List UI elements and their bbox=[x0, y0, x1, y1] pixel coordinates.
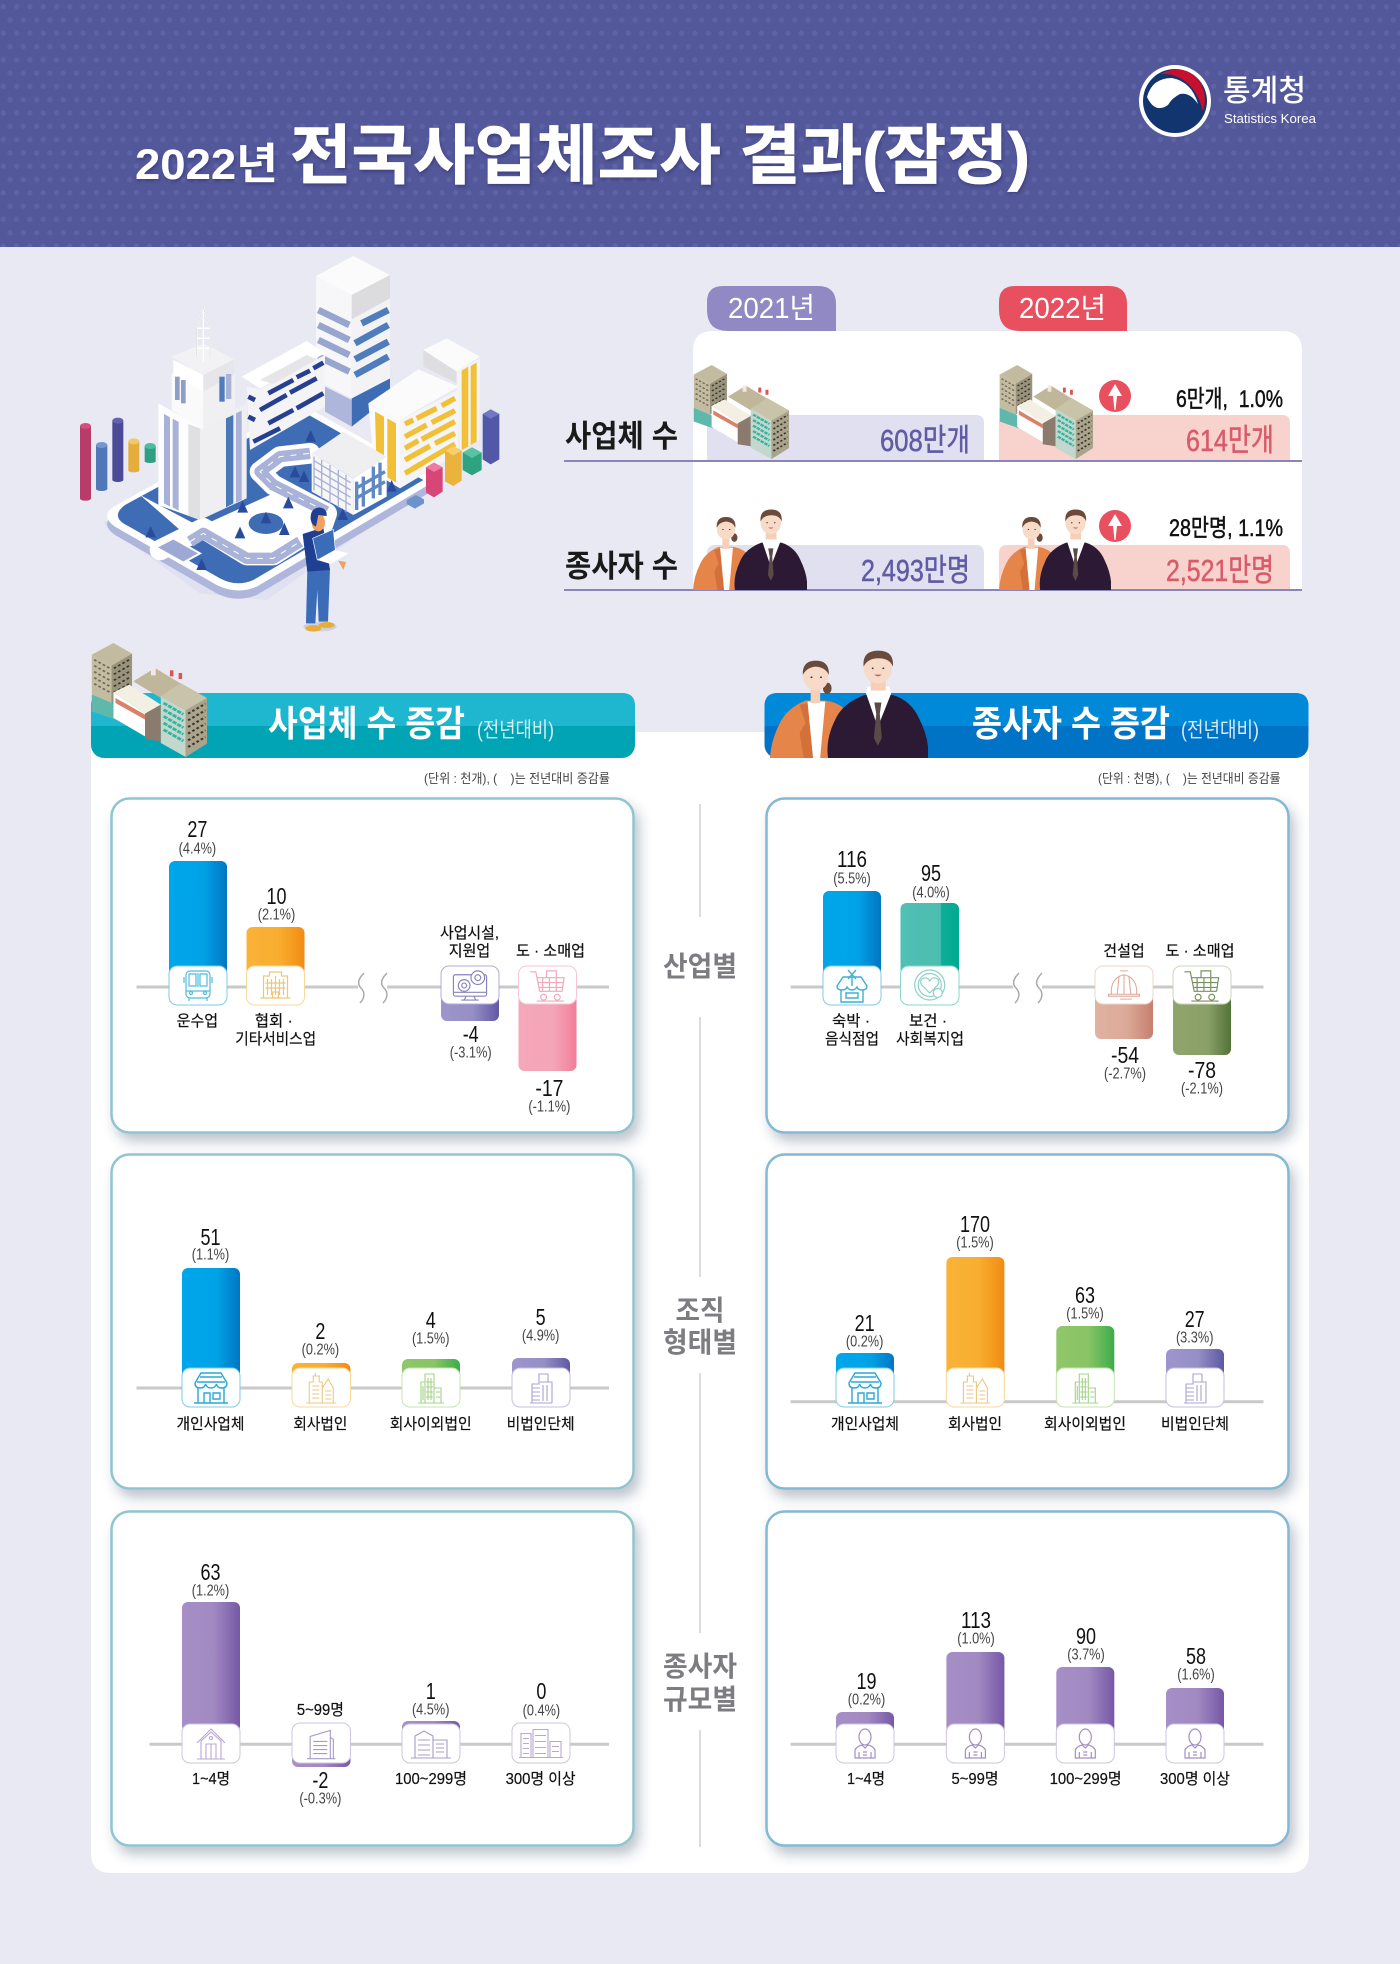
row: establishments: 사업체 수 bbox=[565, 419, 678, 454]
bar: wholesale and retail: (-1.1%) bbox=[528, 1098, 570, 1116]
unit note: right: (단위 : 천명), ( )는 전년대비 증감률 bbox=[1098, 771, 1281, 786]
bar: non-corporate organizations: 5 bbox=[536, 1304, 546, 1330]
panel: workers by industry bbox=[766, 798, 1288, 1132]
center divider and row labels: 규모별 bbox=[663, 1684, 737, 1715]
panel: national totals bbox=[564, 286, 1302, 591]
bar: non-company corporations bbox=[1044, 1282, 1126, 1433]
bar: transport: 27 bbox=[187, 816, 207, 842]
bar: business facilities support: (-3.1%) bbox=[450, 1044, 492, 1062]
bar: accommodation and food bbox=[823, 846, 881, 1048]
bar: sole proprietors bbox=[831, 1310, 899, 1433]
bar: 5-99 persons: 5~99명 bbox=[297, 1701, 344, 1719]
row: establishments: 6만개, 1.0% bbox=[1176, 386, 1283, 413]
panel: establishments by organization bbox=[112, 1154, 634, 1488]
heading: establishments change bbox=[91, 643, 635, 758]
bar: 300 or more persons: (0.4%) bbox=[523, 1702, 560, 1720]
row: workers bbox=[564, 509, 1302, 591]
bar: business facilities support: 지원업 bbox=[449, 942, 490, 960]
center divider and row labels: 조직 bbox=[676, 1295, 724, 1326]
bar: accommodation and food: 음식점업 bbox=[825, 1030, 879, 1048]
bar: sole proprietors bbox=[176, 1224, 244, 1433]
bar: non-company corporations: (1.5%) bbox=[412, 1330, 449, 1348]
icon: up arrow bbox=[1099, 510, 1131, 542]
bar: 5-99 persons: (1.0%) bbox=[957, 1630, 995, 1648]
icon: up arrow bbox=[1099, 380, 1131, 412]
bar: construction bbox=[1095, 942, 1153, 1082]
bar: 100-299 persons bbox=[395, 1678, 467, 1788]
bar: corporations bbox=[292, 1318, 350, 1433]
bar: business facilities support: 사업시설, bbox=[440, 924, 499, 942]
center divider and row labels: 종사자 bbox=[663, 1651, 737, 1682]
bar: 300 or more persons: 0 bbox=[536, 1678, 546, 1704]
bar: 100-299 persons: 100~299명 bbox=[1050, 1770, 1122, 1788]
bar: transport: (4.4%) bbox=[179, 840, 216, 858]
row: establishments: 614만개 bbox=[1186, 423, 1274, 458]
heading: establishments change: 사업체 수 증감 bbox=[268, 703, 465, 744]
bar: non-corporate organizations bbox=[507, 1304, 575, 1433]
heading: establishments change: (전년대비) bbox=[477, 719, 554, 742]
bar: sole proprietors: 21 bbox=[855, 1310, 875, 1336]
bar: construction: (-2.7%) bbox=[1104, 1066, 1146, 1082]
bar: 5-99 persons: 5~99명 bbox=[952, 1770, 998, 1788]
bar: accommodation and food: 숙박 · bbox=[832, 1012, 870, 1030]
logo: Statistics Korea: Statistics Korea bbox=[1224, 111, 1317, 126]
row: establishments: 608만개 bbox=[880, 423, 970, 458]
bar: non-corporate organizations: 비법인단체 bbox=[507, 1415, 575, 1433]
bar: wholesale and retail: 도 · 소매업 bbox=[516, 942, 585, 960]
bar: 1-4 persons: 1~4명 bbox=[192, 1770, 230, 1788]
bar: corporations: (1.5%) bbox=[956, 1234, 994, 1252]
heading: workers change: (전년대비) bbox=[1181, 719, 1259, 742]
bar: wholesale and retail: -17 bbox=[535, 1075, 563, 1101]
heading: workers change bbox=[764, 651, 1308, 758]
bar: health and social work bbox=[896, 860, 964, 1048]
bar: non-corporate organizations: 27 bbox=[1185, 1306, 1205, 1332]
bar: 100-299 persons: 100~299명 bbox=[395, 1770, 467, 1788]
row: workers: 종사자 수 bbox=[565, 549, 678, 584]
bar: non-corporate organizations: (4.9%) bbox=[522, 1328, 559, 1344]
unit note: left: (단위 : 천개), ( )는 전년대비 증감률 bbox=[424, 771, 610, 786]
bar: non-company corporations bbox=[390, 1307, 472, 1433]
bar: construction: 건설업 bbox=[1103, 942, 1145, 960]
bar: corporations: 170 bbox=[960, 1211, 990, 1237]
bar: 5-99 persons: (-0.3%) bbox=[299, 1790, 341, 1808]
bar: associations and other services: 10 bbox=[266, 883, 286, 909]
bar: corporations: 2 bbox=[315, 1318, 325, 1344]
bar: 100-299 persons: 90 bbox=[1076, 1623, 1096, 1649]
bar: wholesale and retail: (-2.1%) bbox=[1181, 1080, 1223, 1098]
bar: 300 or more persons: (1.6%) bbox=[1177, 1666, 1215, 1684]
title: 2022년 bbox=[135, 141, 278, 189]
bar: 100-299 persons: 1 bbox=[426, 1678, 436, 1704]
bar: corporations: 회사법인 bbox=[948, 1415, 1002, 1433]
bar: 1-4 persons: 1~4명 bbox=[847, 1770, 885, 1788]
bar: accommodation and food: 116 bbox=[837, 846, 867, 872]
bar: health and social work: 95 bbox=[921, 860, 941, 886]
bar: 100-299 persons: (3.7%) bbox=[1067, 1646, 1105, 1664]
bar: sole proprietors: (0.2%) bbox=[846, 1334, 883, 1350]
bar: non-company corporations: 63 bbox=[1075, 1282, 1095, 1308]
bar: associations and other services: 기타서비스업 bbox=[235, 1030, 316, 1048]
bar: 5-99 persons: -2 bbox=[312, 1767, 328, 1793]
bar: wholesale and retail bbox=[516, 942, 585, 1116]
bar: 5-99 persons bbox=[946, 1607, 1004, 1788]
bar: sole proprietors: 개인사업체 bbox=[831, 1415, 899, 1433]
panel: workers by employee size bbox=[766, 1512, 1288, 1846]
bar: wholesale and retail: -78 bbox=[1188, 1057, 1216, 1083]
header band bbox=[0, 0, 1400, 247]
center divider and row labels: 산업별 bbox=[663, 951, 737, 982]
trees bbox=[145, 430, 397, 570]
tab: 2022 bbox=[999, 286, 1127, 331]
bar: 300 or more persons bbox=[1160, 1643, 1230, 1788]
bar: non-company corporations: 회사이외법인 bbox=[390, 1415, 472, 1433]
bar: health and social work: 보건 · bbox=[909, 1012, 947, 1030]
bar: corporations: 회사법인 bbox=[293, 1415, 347, 1433]
bar: non-company corporations: 4 bbox=[426, 1307, 436, 1333]
tab: 2021 bbox=[707, 286, 836, 331]
row: establishments bbox=[564, 365, 1302, 462]
bar: health and social work: (4.0%) bbox=[912, 884, 950, 902]
bar: accommodation and food: (5.5%) bbox=[833, 870, 871, 888]
bar: transport bbox=[169, 816, 227, 1030]
bar: corporations bbox=[946, 1211, 1004, 1433]
panel: main white background bbox=[91, 732, 1309, 1873]
buildings bbox=[352, 378, 390, 427]
bar: wholesale and retail bbox=[1166, 942, 1234, 1098]
logo: Statistics Korea bbox=[1139, 65, 1317, 137]
tab: 2021: 2021년 bbox=[728, 293, 815, 325]
tab: 2022: 2022년 bbox=[1019, 293, 1106, 325]
bar: non-company corporations: 회사이외법인 bbox=[1044, 1415, 1126, 1433]
illustration: isometric city on a smartphone with analyst bbox=[80, 256, 499, 632]
chart bars bbox=[80, 409, 499, 509]
bar: 5-99 persons bbox=[292, 1701, 350, 1808]
bar: 1-4 persons: 19 bbox=[856, 1668, 876, 1694]
bar: non-corporate organizations: 비법인단체 bbox=[1161, 1415, 1229, 1433]
bar: 5-99 persons: 113 bbox=[961, 1607, 991, 1633]
bar: non-corporate organizations: (3.3%) bbox=[1176, 1330, 1213, 1346]
bar: 300 or more persons: 300명 이상 bbox=[506, 1770, 576, 1788]
bar: 100-299 persons bbox=[1050, 1623, 1122, 1788]
bar: 300 or more persons: 300명 이상 bbox=[1160, 1770, 1230, 1788]
bar: corporations: (0.2%) bbox=[302, 1342, 339, 1358]
row: workers: 2,521만명 bbox=[1166, 553, 1274, 588]
bar: sole proprietors: (1.1%) bbox=[192, 1246, 229, 1264]
logo: Statistics Korea: 통계청 bbox=[1223, 75, 1306, 108]
row: workers: 2,493만명 bbox=[861, 553, 970, 588]
center divider and row labels bbox=[663, 804, 737, 1847]
center divider and row labels: 형태별 bbox=[663, 1327, 737, 1358]
bar: 1-4 persons bbox=[836, 1668, 894, 1788]
bar: sole proprietors: 개인사업체 bbox=[176, 1415, 244, 1433]
bar: 300 or more persons bbox=[506, 1678, 576, 1788]
bar: construction: -54 bbox=[1111, 1042, 1139, 1068]
bar: 1-4 persons bbox=[182, 1559, 240, 1788]
bar: non-corporate organizations bbox=[1161, 1306, 1229, 1433]
bar: non-company corporations: (1.5%) bbox=[1066, 1306, 1104, 1322]
bar: health and social work: 사회복지업 bbox=[896, 1030, 964, 1048]
title: 전국사업체조사 결과(잠정) bbox=[290, 119, 1030, 192]
panel: establishments by employee size bbox=[112, 1512, 634, 1846]
heading: workers change: 종사자 수 증감 bbox=[972, 703, 1170, 744]
panel: establishments by industry bbox=[112, 798, 634, 1132]
analyst figure bbox=[303, 507, 349, 632]
bar: 1-4 persons: (0.2%) bbox=[848, 1692, 885, 1708]
panel: workers by organization bbox=[766, 1154, 1288, 1488]
bar: 100-299 persons: (4.5%) bbox=[412, 1702, 449, 1718]
bar: 300 or more persons: 58 bbox=[1186, 1643, 1206, 1669]
bar: wholesale and retail: 도 · 소매업 bbox=[1166, 942, 1234, 960]
row: workers: 28만명, 1.1% bbox=[1169, 515, 1283, 542]
bar: associations and other services bbox=[235, 883, 316, 1048]
bar: associations and other services: 협회 · bbox=[255, 1012, 293, 1030]
bar: business facilities support: -4 bbox=[463, 1021, 479, 1047]
bar: 1-4 persons: (1.2%) bbox=[192, 1582, 229, 1600]
bar: sole proprietors: 51 bbox=[200, 1224, 220, 1250]
bar: associations and other services: (2.1%) bbox=[258, 906, 295, 924]
bar: 1-4 persons: 63 bbox=[200, 1559, 220, 1585]
bar: business facilities support bbox=[440, 924, 499, 1062]
bar: transport: 운수업 bbox=[177, 1012, 218, 1030]
